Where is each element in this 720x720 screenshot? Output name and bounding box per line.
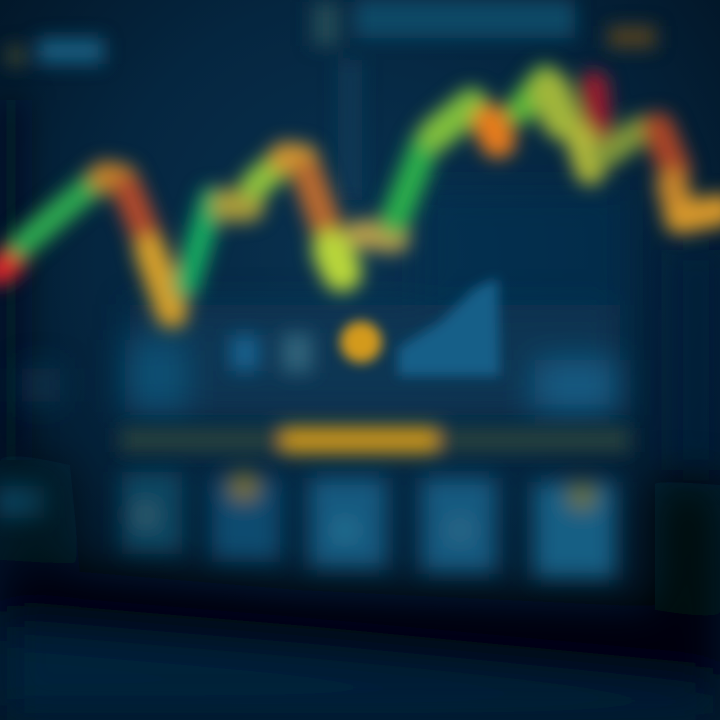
dark floor band <box>0 450 720 720</box>
band label bar <box>120 426 630 454</box>
area chart wedge <box>398 278 500 376</box>
top header blocks <box>6 0 656 200</box>
dark side edges <box>0 100 720 470</box>
price line <box>0 80 720 312</box>
lower column cards <box>0 472 616 580</box>
small bar cluster <box>230 333 313 373</box>
central chart panel <box>22 190 625 415</box>
highlight marker dot <box>340 321 382 363</box>
